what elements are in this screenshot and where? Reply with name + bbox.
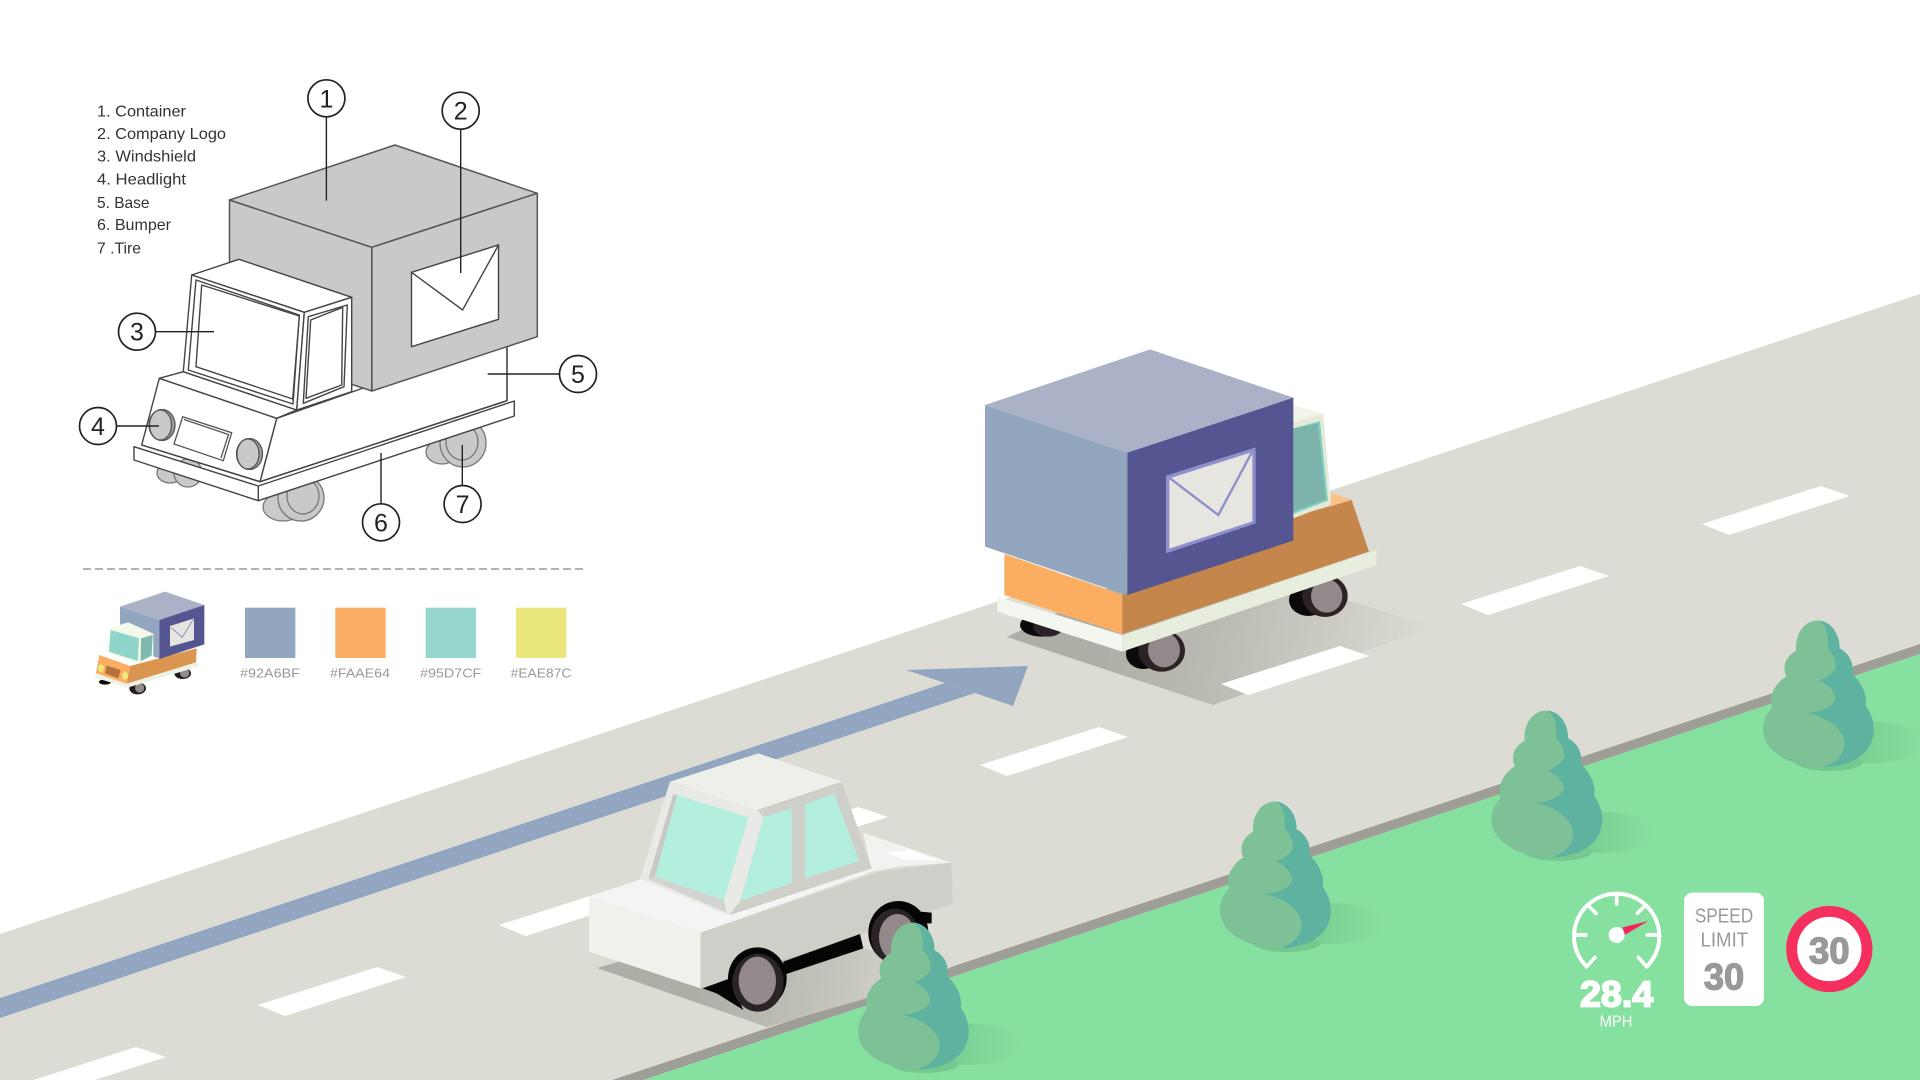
callout lines	[116, 116, 560, 504]
outline cab	[159, 259, 352, 418]
blue lane line	[0, 683, 975, 1018]
callout digits: 1	[319, 85, 333, 113]
road dashes	[18, 486, 1850, 1080]
speed unit: MPH	[1600, 1014, 1632, 1031]
swatch FAAE64	[330, 608, 391, 681]
legend list: 4. Headlight	[97, 172, 187, 189]
car hood	[589, 867, 887, 933]
car windshield	[648, 794, 748, 913]
legend list: 3. Windshield	[97, 148, 196, 165]
grass	[643, 654, 1920, 1080]
swatch 95D7CF	[420, 608, 481, 681]
legend list: 5. Base	[97, 195, 150, 212]
car roof	[670, 753, 842, 810]
delivery truck	[985, 349, 1377, 672]
callout circles	[80, 80, 596, 541]
panel: speed indicators	[1574, 893, 1867, 1031]
car	[589, 753, 953, 1012]
swatch EAE87C: #EAE87C	[511, 666, 572, 681]
panel: colour palette	[240, 608, 572, 681]
speed limit sign	[1684, 893, 1764, 1006]
round speed sign	[1792, 911, 1867, 987]
car rear wheel	[868, 901, 928, 964]
tree 1	[858, 923, 1021, 1073]
speed limit sign: LIMIT	[1700, 929, 1749, 952]
speedometer	[1574, 894, 1659, 967]
truck cab	[1293, 405, 1331, 518]
tree 3	[1492, 711, 1655, 861]
palette truck icon	[95, 592, 204, 694]
round speed sign: 30	[1809, 929, 1850, 971]
panel: parts diagram	[80, 80, 596, 541]
outline truck container	[230, 145, 537, 391]
outline headlights and plate	[149, 410, 262, 470]
truck shadow	[1007, 563, 1433, 705]
callout digits: 5	[571, 361, 585, 389]
arrow head	[906, 666, 1028, 706]
speed value: 28.4	[1580, 974, 1653, 1015]
truck container	[985, 349, 1293, 595]
truck far wheel	[1020, 613, 1063, 637]
legend list: 6. Bumper	[97, 217, 172, 234]
swatch 95D7CF: #95D7CF	[420, 666, 481, 681]
dashed divider	[83, 568, 586, 570]
road	[0, 294, 1920, 1080]
tree 2	[1220, 802, 1383, 952]
car pillar	[640, 782, 764, 915]
swatch FAAE64: #FAAE64	[330, 666, 391, 681]
outline logo	[412, 245, 498, 347]
legend list	[97, 104, 226, 257]
curb	[612, 644, 1920, 1080]
car body side	[701, 863, 953, 988]
car shadow	[597, 937, 963, 1027]
swatch 92A6BF	[240, 608, 300, 681]
base edge	[506, 347, 508, 401]
truck logo	[1166, 447, 1256, 553]
car body front	[589, 897, 701, 988]
speed limit sign: 30	[1704, 955, 1744, 997]
truck base	[1004, 493, 1369, 634]
callout digits: 7	[456, 491, 470, 519]
outline truck base	[142, 347, 507, 482]
outline truck wheels	[157, 419, 486, 521]
speed limit sign: SPEED	[1695, 905, 1753, 928]
car front wheel	[728, 947, 787, 1012]
callout digits: 3	[130, 319, 144, 347]
outline bumper	[134, 401, 514, 501]
truck front wheel	[1126, 630, 1185, 672]
legend list: 7 .Tire	[97, 240, 141, 257]
truck rear wheel	[1289, 575, 1348, 617]
callout digits	[91, 85, 585, 537]
car trunk	[863, 833, 952, 872]
swatch EAE87C	[511, 608, 572, 681]
legend list: 2. Company Logo	[97, 126, 226, 143]
legend list: 1. Container	[97, 104, 187, 121]
swatch 92A6BF: #92A6BF	[240, 666, 300, 681]
car cabin side	[730, 782, 872, 915]
tree 4	[1763, 621, 1920, 771]
car side windows	[741, 794, 859, 901]
truck bumper	[997, 550, 1377, 652]
car chassis	[703, 912, 932, 1010]
callout digits: 2	[454, 98, 468, 126]
callout digits: 4	[91, 413, 105, 441]
callout digits: 6	[374, 509, 388, 537]
